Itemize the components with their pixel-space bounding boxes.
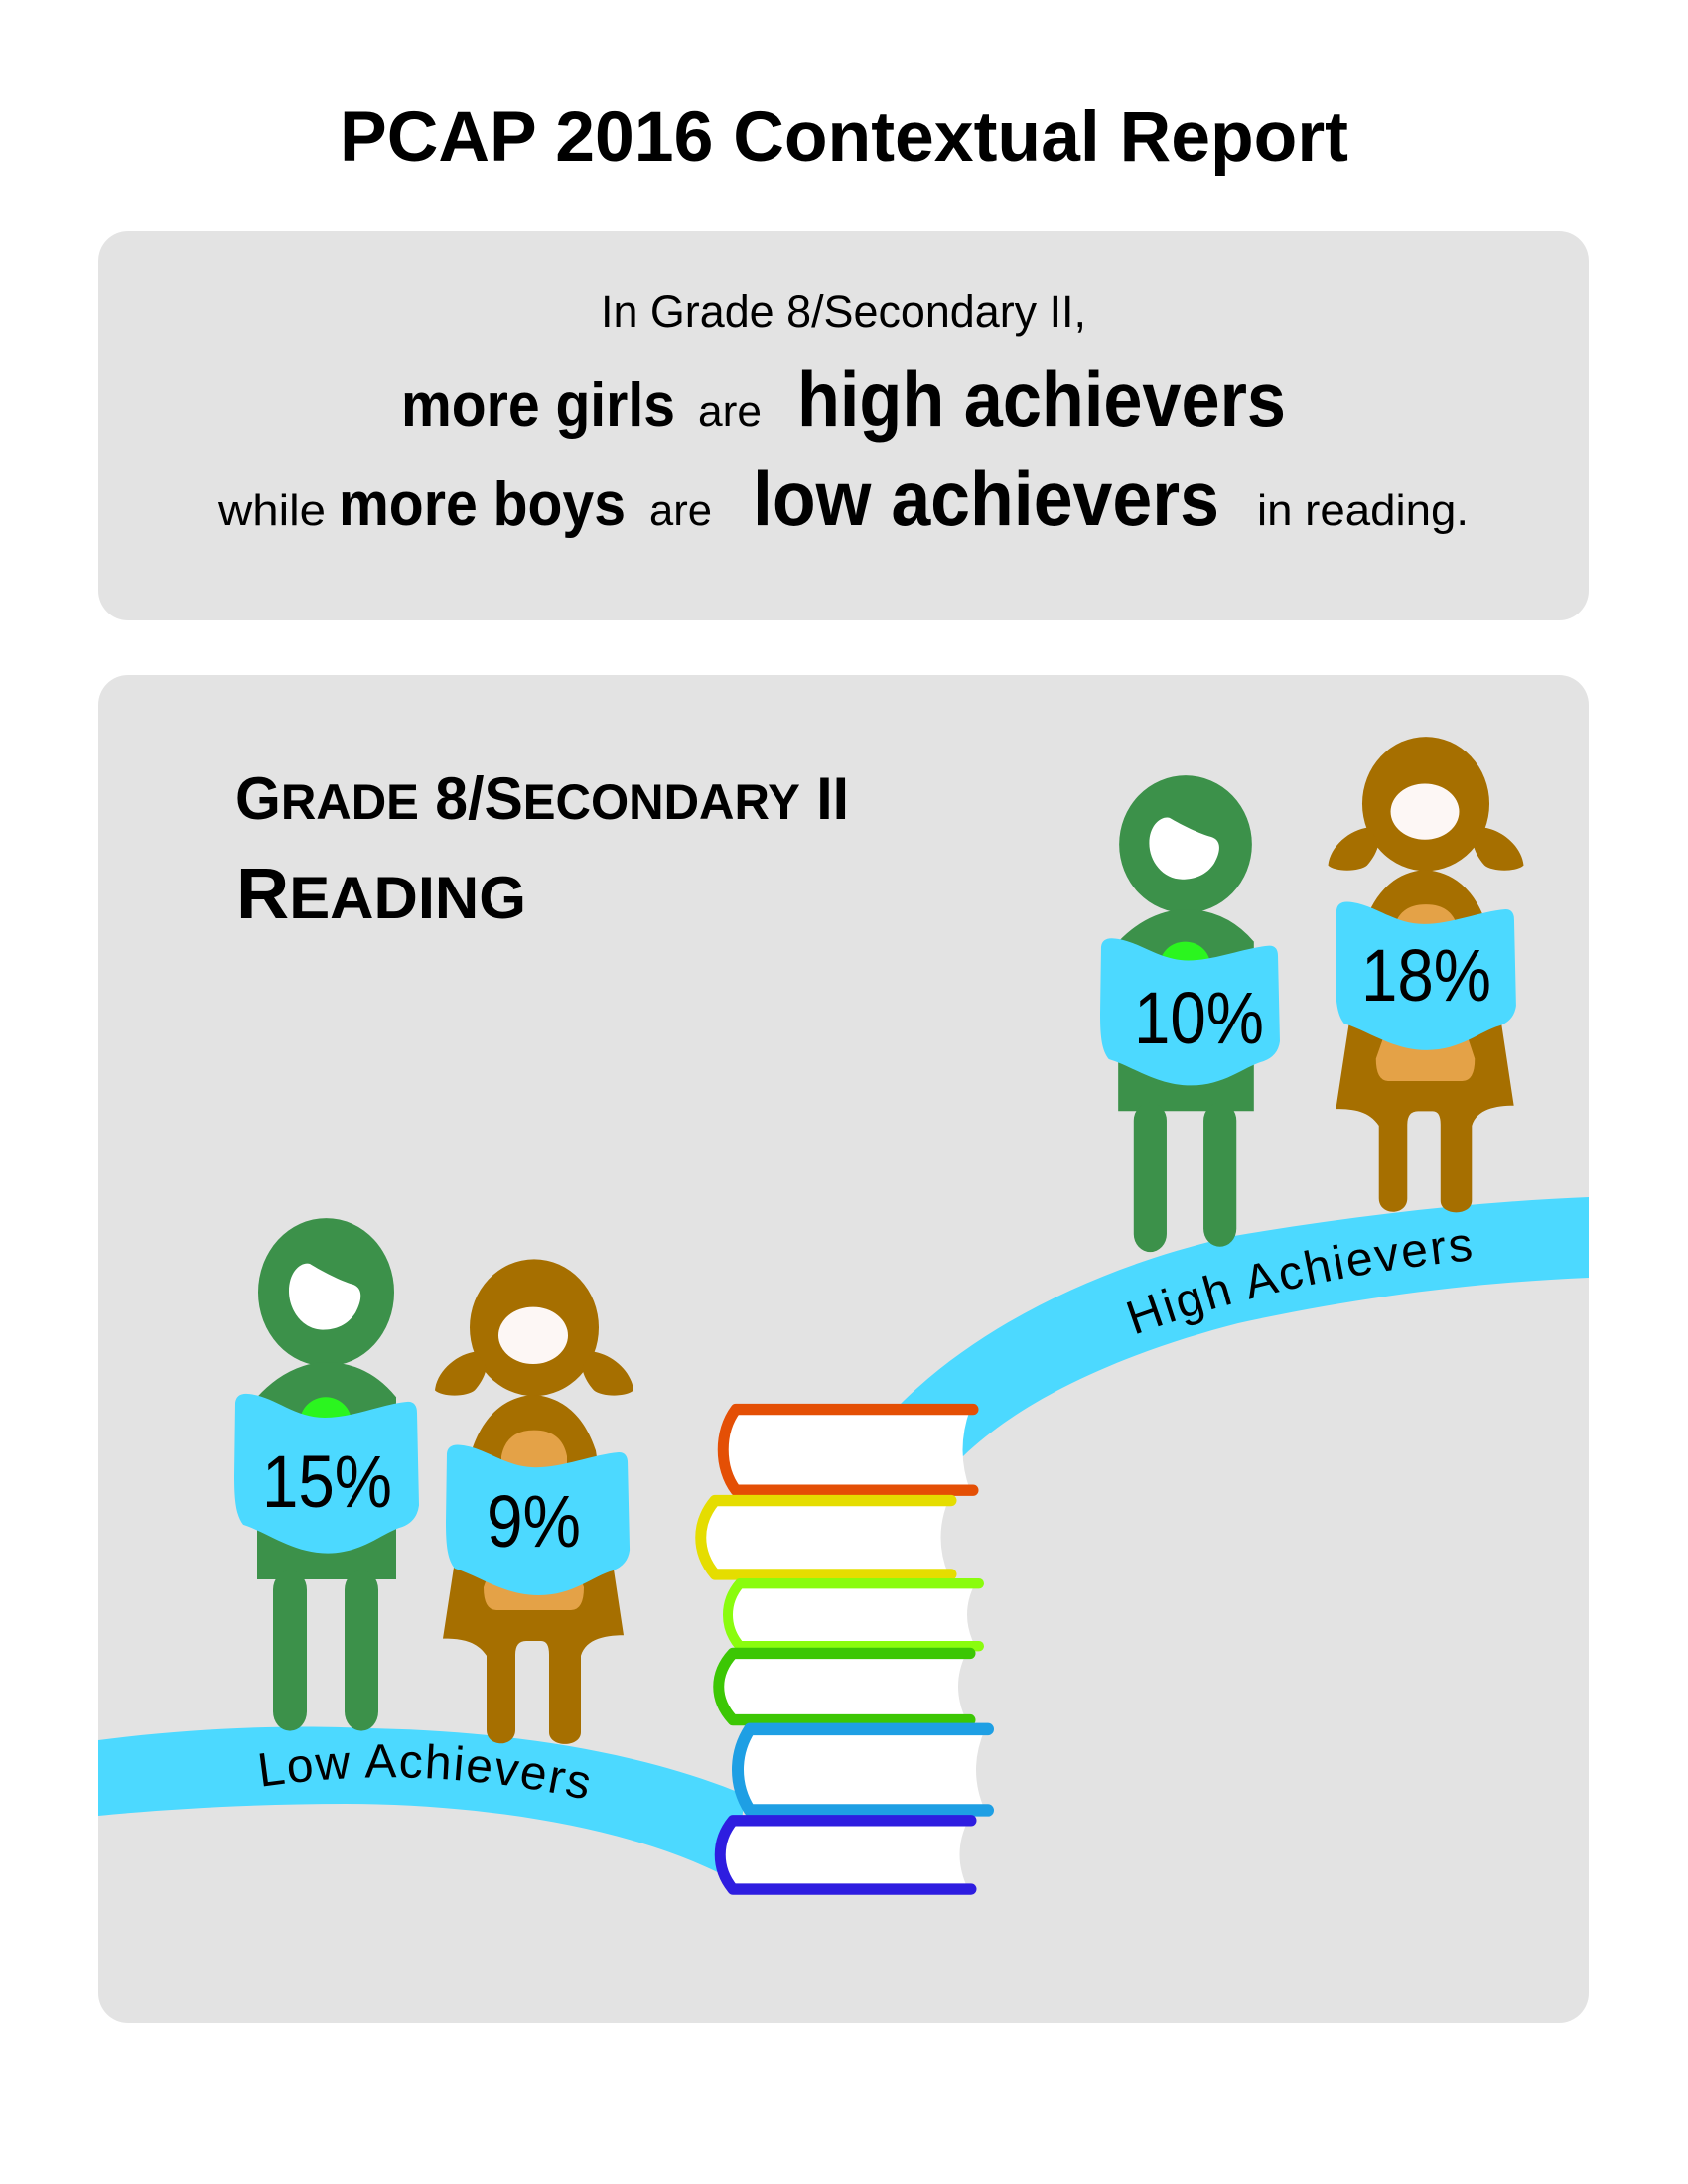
summary line 1: In Grade 8/Secondary II, <box>601 286 1086 337</box>
value: 10%: 10% <box>1134 977 1264 1059</box>
girl head <box>470 1259 599 1396</box>
boy body <box>1118 910 1254 1111</box>
summary line 3: more boys <box>339 471 626 539</box>
book: yellow <box>701 1501 951 1574</box>
summary line 3: low achievers <box>753 455 1219 542</box>
summary line 3 <box>217 455 1469 542</box>
summary line 2: are <box>698 387 762 436</box>
summary line 3: are <box>649 486 712 535</box>
summary line 3: in reading. <box>1257 486 1469 535</box>
boy face <box>289 1264 360 1330</box>
panel: reading chart <box>98 675 1589 2023</box>
summary line 2: high achievers <box>797 355 1286 443</box>
girl pigtails <box>1329 827 1523 871</box>
stack of books <box>701 1410 988 1889</box>
heading: subject: READING <box>236 855 526 934</box>
girl face <box>1391 783 1459 840</box>
book: orange <box>723 1410 973 1490</box>
girl head <box>1362 737 1489 871</box>
label: low achievers: Low Achievers <box>260 1743 589 1799</box>
figure: high achiever boy <box>1118 775 1254 1252</box>
label: high achievers: High Achievers <box>1126 1235 1472 1334</box>
figure: high achiever girl <box>1329 737 1523 1212</box>
boy body <box>257 1363 396 1579</box>
girl body <box>443 1395 624 1744</box>
book: 18 percent <box>1336 902 1516 1050</box>
ribbon: low achievers <box>98 1727 743 1872</box>
boy chest <box>300 1397 352 1447</box>
figure: low achiever boy <box>257 1218 396 1731</box>
book: 9 percent <box>446 1444 630 1595</box>
book: 15 percent <box>234 1394 419 1554</box>
figure: low achiever girl <box>435 1259 633 1744</box>
heading: grade: GRADE 8/SECONDARY II <box>235 765 849 832</box>
girl body <box>1336 870 1514 1212</box>
value: 18%: 18% <box>1361 934 1491 1017</box>
book: 10 percent <box>1100 938 1280 1085</box>
girl face <box>498 1307 568 1364</box>
girl chest <box>484 1431 584 1610</box>
book: blue <box>738 1729 988 1810</box>
boy face <box>1149 818 1219 880</box>
value: 9%: 9% <box>487 1480 581 1563</box>
girl chest <box>1376 904 1475 1081</box>
summary line 2: more girls <box>401 371 675 440</box>
girl pigtails <box>435 1351 633 1396</box>
panel: summary <box>98 231 1589 620</box>
ribbon: high achievers <box>901 1197 1589 1456</box>
boy legs <box>273 1570 378 1731</box>
boy legs <box>1134 1103 1236 1252</box>
title: PCAP 2016 Contextual Report <box>340 98 1348 177</box>
boy head <box>1119 775 1252 913</box>
boy chest <box>1160 942 1210 989</box>
boy head <box>258 1218 394 1366</box>
book: green <box>719 1653 970 1720</box>
book: lime <box>728 1583 979 1646</box>
book: indigo <box>720 1821 971 1889</box>
summary line 3: while <box>217 486 326 535</box>
value: 15%: 15% <box>262 1440 392 1523</box>
summary line 2 <box>401 355 1286 443</box>
